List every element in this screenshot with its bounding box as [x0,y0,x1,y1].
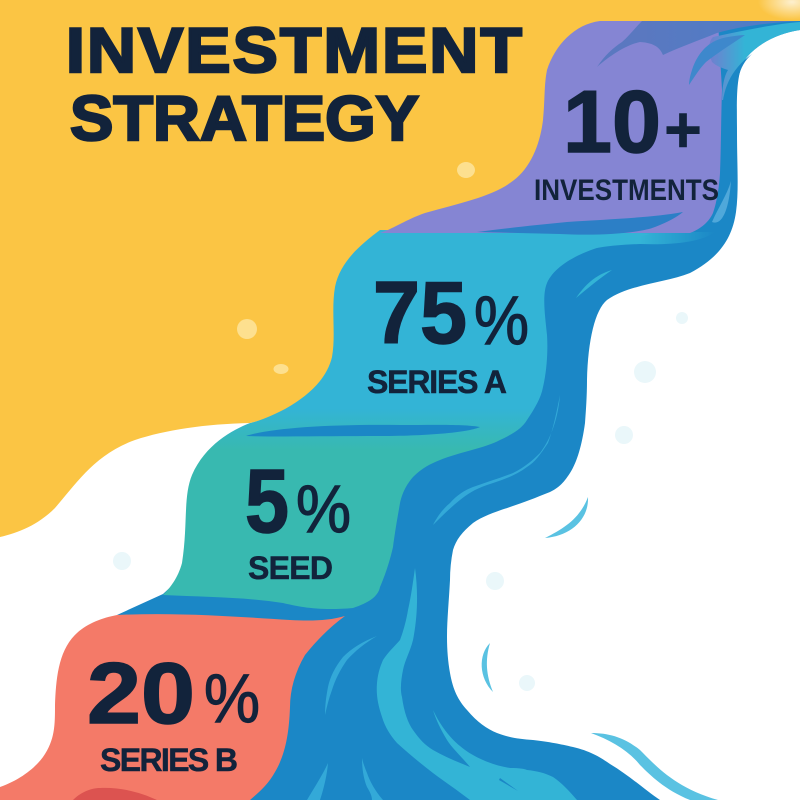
stat: 5% seed [245,452,351,586]
swoosh: blue curl top right [689,35,745,85]
swoosh: blue strip right of cyan band [722,54,752,115]
yellow background panel [0,0,800,537]
bubble [113,552,131,570]
title [66,16,524,154]
stat: 20% series B: % [204,660,260,737]
title: INVESTMENT [66,16,524,86]
swoosh: white-area splash bottom [591,733,718,800]
bubbles on yellow [237,162,475,374]
bubble [237,319,257,339]
panel: 20% series B [0,614,345,800]
stat: 10+ investments: + [664,92,702,166]
cyan river streams lower [307,568,577,800]
panel: 10+ investments [380,21,722,233]
bubbles on white [113,312,688,691]
swoosh: left stream two [307,763,328,800]
title: STRATEGY [70,84,419,154]
swoosh: blue lens between cyan and green [246,425,480,436]
red shape at bottom of coral panel [73,788,157,800]
swoosh: blue lens lower purple panel [477,212,683,235]
bubble [634,361,656,383]
corner glow [758,0,800,20]
stat: 10+ investments: 10 [563,72,661,171]
swoosh: left stream three [362,758,383,800]
stat: 75% series A: 75 [373,263,467,362]
stat: 10+ investments: INVESTMENTS [534,174,719,207]
swoosh: middle river [433,395,560,525]
stat: 75% series A: SERIES A [367,364,507,400]
bubble [457,162,475,178]
bubble [615,426,633,444]
swoosh: white-area splash left [482,643,493,692]
stat: 20% series B [87,646,260,778]
swoosh: small dark line in stream [499,778,518,791]
stat: 5% seed: 5 [245,452,289,552]
swoosh: white-area splash upper [545,497,588,538]
stat: 20% series B: 20 [87,646,195,742]
bubble [486,572,504,590]
bubble [519,675,535,691]
stat: 5% seed: SEED [248,550,333,586]
bubble [274,364,288,374]
swoosh: dark band top of purple panel [597,21,800,67]
stat: 5% seed: % [296,472,351,547]
swoosh: left stream one [325,636,377,715]
bubble [676,312,688,324]
panel: cyan strip under purple panel [560,232,715,254]
stat: 75% series A: % [474,282,529,359]
stat: 20% series B: SERIES B [100,742,238,778]
panel: 75% series A and 5% seed [163,230,650,609]
swoosh: cyan band at top right [709,22,800,100]
swoosh: main stream [377,568,577,800]
swoosh: cyan streak upper river [576,270,612,298]
stat: 10+ investments [534,72,719,207]
swoosh: light streak lower right purple [712,181,731,223]
stat: 75% series A [367,263,529,400]
